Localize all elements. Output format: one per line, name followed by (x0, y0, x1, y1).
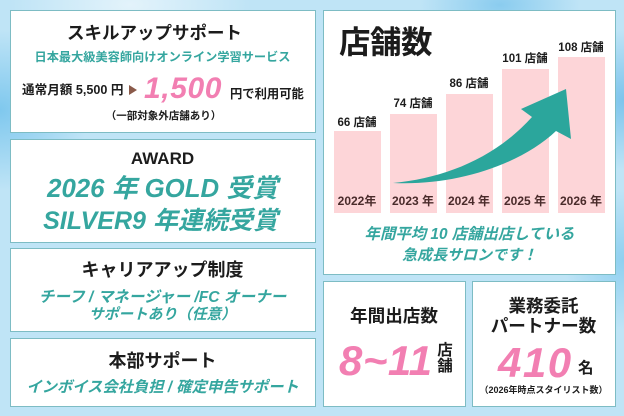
year: 2022: 2022年 (338, 194, 376, 208)
note: some stores excluded: （一部対象外店舗あり） (106, 110, 221, 122)
bar: 2022 (334, 131, 381, 213)
heading: career up system: キャリアアップ制度 (82, 260, 244, 280)
heading: annual openings: 年間出店数 (350, 306, 438, 326)
panel: headquarters support (10, 338, 316, 407)
text: silver award: SILVER9 年連続受賞 (43, 207, 278, 235)
bar: 2025 (502, 69, 549, 213)
unit: people: 名 (578, 360, 594, 377)
heading: headquarters support: 本部サポート (108, 351, 216, 371)
text: regular monthly price: 通常月額 5,500 円 (22, 83, 123, 97)
panel: partners (472, 281, 616, 407)
price: 1,500: 1,500 (144, 72, 222, 105)
heading: store count: 店舗数 (339, 24, 432, 60)
unit: stores: 舗 (437, 358, 453, 375)
value: 74: 74 店舗 (394, 98, 432, 110)
panel: annual openings (323, 281, 466, 407)
caption: rapid growth salon: 急成長サロンです！ (402, 247, 537, 264)
text: invoice and tax support: インボイス会社負担 / 確定申告サポート (26, 379, 299, 396)
value: 108: 108 店舗 (558, 42, 604, 54)
heading: award: AWARD (131, 149, 194, 168)
bar: 2023 (390, 114, 437, 213)
caption: average stores per year: 年間平均 10 店舗出店している (365, 226, 574, 243)
panel: award (10, 139, 316, 243)
year: 2026: 2026 年 (560, 194, 602, 208)
value: 86: 86 店舗 (450, 78, 488, 90)
value: 66: 66 店舗 (338, 117, 376, 129)
heading: outsourcing: 業務委託 (508, 296, 578, 316)
year: 2025: 2025 年 (504, 194, 546, 208)
unit: stores (437, 342, 453, 375)
text: available for yen: 円で利用可能 (230, 87, 304, 101)
text: gold award: 2026 年 GOLD 受賞 (47, 175, 278, 203)
year: 2023: 2023 年 (392, 194, 434, 208)
bar: 2024 (446, 94, 493, 213)
bar chart (334, 41, 605, 213)
text: optional support: サポートあり（任意） (89, 307, 236, 323)
unit: stores: 店 (437, 342, 453, 359)
note: stylist count: （2026年時点スタイリスト数） (479, 385, 608, 395)
text: roles: チーフ / マネージャー /FC オーナー (39, 289, 286, 306)
heading: skill up support: スキルアップサポート (67, 23, 242, 43)
panel: store count (323, 10, 616, 275)
subheading: online learning service: 日本最大級美容師向けオンライン学習サービス (35, 50, 290, 64)
year: 2024: 2024 年 (448, 194, 490, 208)
value: 101: 101 店舗 (502, 53, 548, 65)
bar: 2026 (558, 57, 605, 213)
icon: price arrow (129, 85, 137, 95)
panel: skill up support (10, 10, 316, 133)
panel: career up (10, 248, 316, 332)
arrow: growth (393, 89, 571, 184)
heading: partner count: パートナー数 (491, 316, 596, 336)
number: 410: 410 (498, 339, 573, 386)
number: 8 to 11: 8~11 (339, 337, 432, 384)
